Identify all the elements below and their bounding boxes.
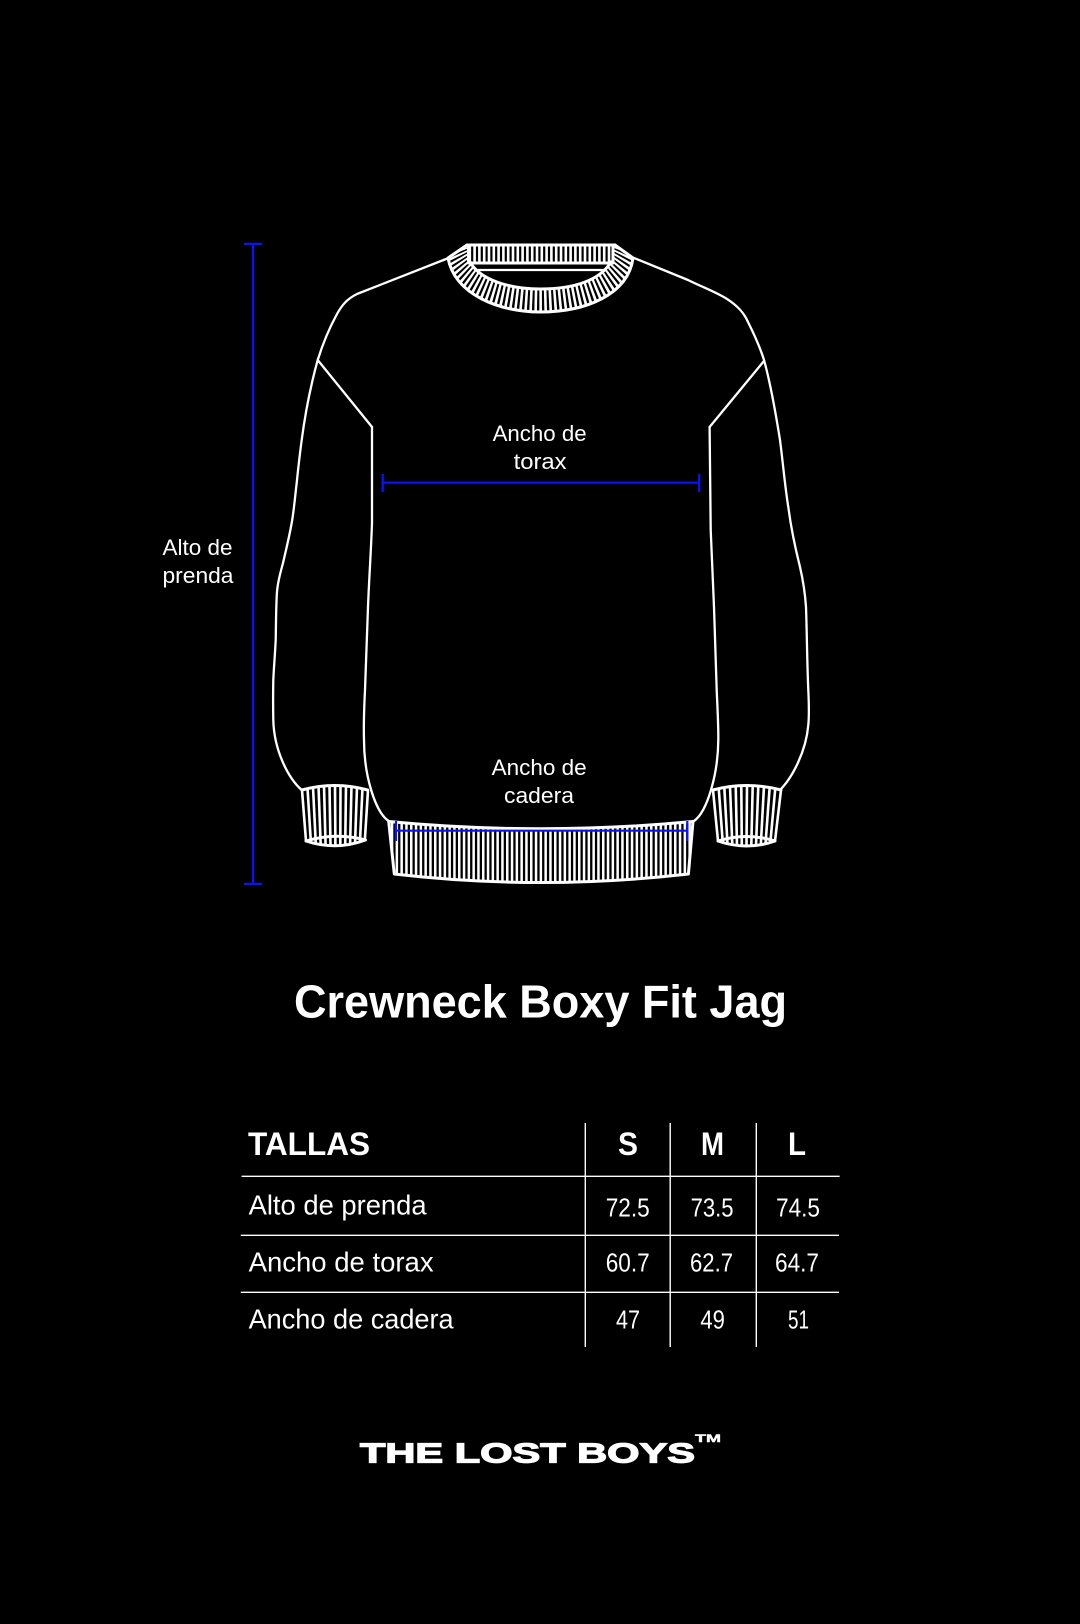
right cuff ribbing bbox=[713, 786, 781, 846]
row: Alto de prenda: 73.5 bbox=[691, 1193, 734, 1223]
table header: M bbox=[701, 1126, 724, 1162]
row: Alto de prenda: 72.5 bbox=[606, 1193, 650, 1223]
label: Ancho de cadera: Ancho de bbox=[492, 755, 587, 780]
row: Alto de prenda bbox=[249, 1189, 820, 1223]
label: Ancho de torax: torax bbox=[514, 449, 567, 474]
brand logo: THE LOST BOYS bbox=[360, 1438, 695, 1469]
table grid bbox=[241, 1123, 840, 1347]
row: Ancho de cadera: Ancho de cadera bbox=[249, 1304, 454, 1335]
row: Alto de prenda: 74.5 bbox=[776, 1193, 820, 1223]
label: Alto de prenda bbox=[162, 535, 234, 588]
right armhole seam bbox=[710, 361, 764, 427]
left cuff ribbing bbox=[302, 786, 368, 846]
row: Ancho de cadera bbox=[249, 1304, 809, 1335]
bottom hem ribbing bbox=[386, 822, 696, 882]
sweater illustration bbox=[273, 245, 809, 882]
label: Ancho de torax bbox=[493, 421, 587, 474]
label: Ancho de cadera: cadera bbox=[504, 783, 575, 808]
measure: hip width bbox=[396, 821, 687, 841]
label: Ancho de torax: Ancho de bbox=[493, 421, 587, 446]
row: Ancho de cadera: 47 bbox=[616, 1305, 640, 1335]
collar ribbing bbox=[444, 245, 637, 312]
table header: TALLAS bbox=[248, 1126, 370, 1162]
row: Ancho de torax: 62.7 bbox=[690, 1248, 733, 1278]
brand logo: TM bbox=[695, 1433, 721, 1445]
infographic canvas bbox=[162, 242, 840, 1464]
table header bbox=[248, 1126, 806, 1162]
left sleeve and shoulder outline bbox=[273, 258, 449, 790]
row: Ancho de torax: Ancho de torax bbox=[249, 1247, 434, 1278]
label: Ancho de cadera bbox=[492, 755, 587, 808]
row: Ancho de torax: 64.7 bbox=[775, 1248, 819, 1278]
row: Alto de prenda: Alto de prenda bbox=[249, 1189, 427, 1220]
right sleeve and shoulder outline bbox=[634, 258, 809, 790]
table header: S bbox=[618, 1126, 638, 1162]
row: Ancho de cadera: 49 bbox=[700, 1305, 725, 1335]
row: Ancho de cadera: 51 bbox=[788, 1305, 809, 1335]
table header: L bbox=[788, 1126, 806, 1162]
measure: garment height bbox=[244, 244, 262, 884]
row: Ancho de torax bbox=[249, 1247, 819, 1278]
measure: chest width bbox=[383, 474, 699, 492]
left armhole seam bbox=[318, 360, 372, 427]
label: Alto de prenda: prenda bbox=[162, 563, 234, 588]
right body side bbox=[694, 427, 718, 821]
title: Crewneck Boxy Fit Jag bbox=[294, 976, 787, 1028]
label: Alto de prenda: Alto de bbox=[162, 535, 232, 560]
brand logo bbox=[360, 1433, 721, 1469]
row: Ancho de torax: 60.7 bbox=[606, 1248, 650, 1278]
left body side bbox=[364, 427, 389, 821]
size table bbox=[241, 1123, 840, 1347]
